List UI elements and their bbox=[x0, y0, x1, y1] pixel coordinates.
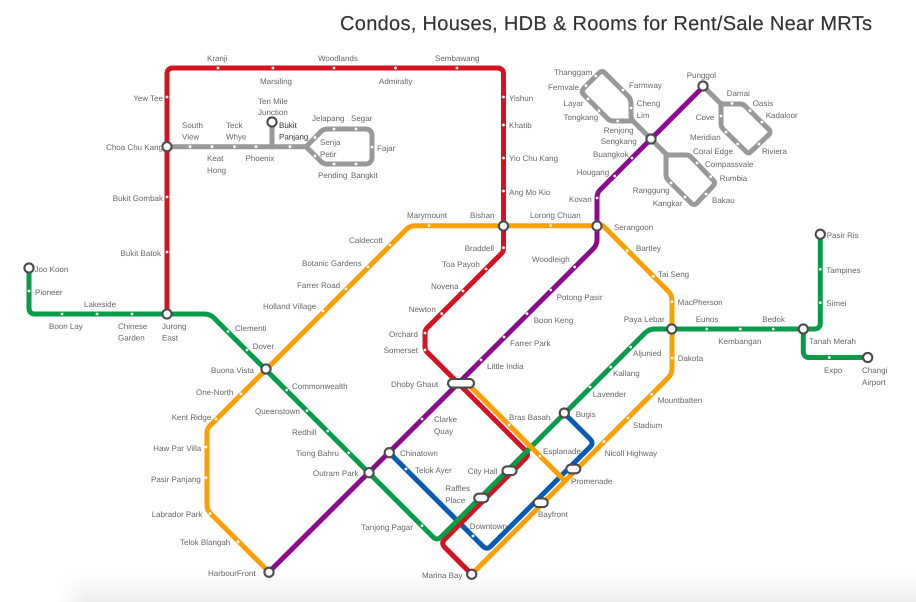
station labels: circle line: Bartley bbox=[636, 244, 661, 253]
station labels: east-west line: Lakeside bbox=[84, 300, 117, 309]
station labels: east-west line: Dover bbox=[253, 342, 274, 351]
station labels: north-south line: Toa Payoh bbox=[442, 260, 480, 269]
station labels: downtown line: Downtown bbox=[470, 522, 507, 531]
title: Condos, Houses, HDB & Rooms for Rent/Sale Near MRTs bbox=[340, 13, 872, 35]
station labels: north-east line: Potong Pasir bbox=[557, 293, 603, 302]
station labels: east-west line: Aljunied bbox=[633, 349, 661, 358]
bottom shadow bbox=[70, 587, 916, 602]
station labels: east-west line: Chinese bbox=[118, 322, 148, 331]
station labels: bukit panjang LRT: Jelapang bbox=[312, 114, 344, 123]
station labels: bukit panjang LRT: Phoenix bbox=[246, 154, 274, 163]
station labels: north-east line bbox=[208, 150, 653, 578]
station labels: north-south line: Yishun bbox=[509, 94, 533, 103]
station labels: north-east line: Clarke bbox=[434, 415, 458, 424]
station labels: bukit panjang LRT: Petir bbox=[320, 150, 337, 159]
station labels: north-south line bbox=[106, 54, 558, 580]
station labels: east-west line: Redhill bbox=[292, 428, 317, 437]
station labels: east-west line: City Hall bbox=[468, 467, 498, 476]
station labels: bukit panjang LRT: Keat bbox=[207, 154, 224, 163]
station labels: sengkang and punggol LRT bbox=[548, 68, 798, 208]
station labels: east-west line: Simei bbox=[826, 299, 847, 308]
line: orange circle bbox=[207, 226, 672, 574]
station labels: circle line: Lorong Chuan bbox=[530, 211, 581, 220]
station labels: circle line: Bras Basah bbox=[509, 413, 550, 422]
station labels: north-south line: Novena bbox=[431, 282, 459, 291]
station labels: circle line: One-North bbox=[196, 388, 233, 397]
station labels: north-south line: Sembawang bbox=[435, 54, 479, 63]
station labels: circle line: Nicoll Highway bbox=[605, 449, 657, 458]
station labels: east-west line: Boon Lay bbox=[49, 322, 83, 331]
station labels: east-west line: Bugis bbox=[576, 410, 596, 419]
station labels: north-south line: Orchard bbox=[389, 330, 418, 339]
station labels: circle line: Labrador Park bbox=[152, 510, 203, 519]
station labels: bukit panjang LRT: Junction bbox=[258, 108, 288, 117]
station labels: circle line bbox=[151, 211, 723, 547]
station labels: east-west line: Tanjong Pagar bbox=[361, 523, 413, 532]
station labels: north-east line: Chinatown bbox=[400, 449, 438, 458]
station labels: circle line: Botanic Gardens bbox=[302, 259, 362, 268]
station labels: east-west line: Raffles bbox=[445, 484, 470, 493]
station labels: east-west line: East bbox=[162, 334, 179, 342]
station labels: bukit panjang LRT: Ten Mile bbox=[258, 97, 288, 106]
station labels: north-south line: Dhoby Ghaut bbox=[391, 380, 439, 389]
station labels: sengkang and punggol LRT: Oasis bbox=[753, 99, 773, 108]
station labels: circle line: Haw Par Villa bbox=[153, 444, 202, 453]
station labels: circle line: Holland Village bbox=[263, 302, 317, 311]
station labels: sengkang and punggol LRT: Meridian bbox=[690, 133, 721, 142]
station labels: bukit panjang LRT: Segar bbox=[351, 114, 373, 123]
station labels: bukit panjang LRT: View bbox=[182, 132, 199, 142]
station labels: bukit panjang LRT bbox=[182, 97, 396, 180]
line: purple north-east bbox=[269, 87, 703, 572]
station labels: north-south line: Admiralty bbox=[379, 77, 412, 86]
station labels: north-east line: Woodleigh bbox=[532, 255, 570, 264]
station labels: sengkang and punggol LRT: Ranggung bbox=[633, 186, 670, 195]
station labels: sengkang and punggol LRT: Cove bbox=[696, 113, 715, 122]
station labels: bukit panjang LRT: Hong bbox=[207, 166, 226, 175]
station labels: north-south line: Newton bbox=[409, 305, 436, 314]
interchange stations bbox=[24, 81, 872, 579]
station labels: bukit panjang LRT: Pending bbox=[318, 171, 347, 180]
station labels: east-west line: Kallang bbox=[613, 369, 640, 378]
station labels: east-west line: Buona Vista bbox=[211, 366, 255, 375]
station labels: east-west line: Outram Park bbox=[313, 469, 359, 478]
station labels: circle line: Tai Seng bbox=[658, 270, 689, 279]
station labels: north-south line: Bishan bbox=[470, 211, 494, 220]
station labels: circle line: Telok Blangah bbox=[180, 538, 230, 547]
station labels: north-south line: Yew Tee bbox=[133, 94, 164, 103]
station labels: east-west line: Tiong Bahru bbox=[296, 449, 339, 458]
station labels: east-west line: Kembangan bbox=[718, 337, 761, 346]
station labels: north-south line: Khatib bbox=[509, 121, 532, 130]
line: green east-west bbox=[29, 234, 868, 539]
station labels: north-east line: Quay bbox=[434, 427, 453, 436]
station labels: north-south line: Marsiling bbox=[260, 77, 292, 86]
station labels: north-east line: Kovan bbox=[569, 195, 592, 204]
station labels: east-west line: Pioneer bbox=[35, 288, 63, 297]
station dots bbox=[28, 67, 831, 543]
station labels: circle line: Kent Ridge bbox=[172, 413, 212, 422]
station labels: north-south line: Ang Mo Kio bbox=[509, 188, 551, 197]
station labels: sengkang and punggol LRT: Coral Edge bbox=[693, 147, 734, 156]
station labels: circle line: Marymount bbox=[407, 211, 448, 220]
station labels: sengkang and punggol LRT: Fernvale bbox=[548, 83, 580, 92]
station labels: east-west line: Lavender bbox=[593, 390, 626, 399]
station labels: east-west line: Place bbox=[445, 496, 466, 505]
station labels: circle line: Caldecott bbox=[349, 236, 384, 245]
station labels: north-east line: Buangkok bbox=[593, 150, 630, 159]
station labels: sengkang and punggol LRT: Cheng bbox=[637, 99, 660, 108]
station labels: bukit panjang LRT: Whye bbox=[226, 132, 247, 142]
station labels: sengkang and punggol LRT: Sengkang bbox=[601, 137, 637, 146]
station labels: north-south line: Kranji bbox=[207, 54, 228, 63]
station labels: sengkang and punggol LRT: Rumbia bbox=[720, 174, 748, 183]
station labels: north-east line: Hougang bbox=[577, 168, 609, 177]
station labels: downtown line: Promenade bbox=[571, 477, 613, 486]
station labels: north-east line: Boon Keng bbox=[534, 316, 573, 325]
station labels: east-west line: Bedok bbox=[762, 315, 786, 324]
line: red north-south bbox=[167, 68, 528, 574]
station labels: north-south line: Bukit Batok bbox=[121, 249, 162, 258]
station labels: circle line: Stadium bbox=[633, 421, 663, 430]
station labels: bukit panjang LRT: Fajar bbox=[377, 144, 396, 153]
station labels: north-east line: HarbourFront bbox=[208, 569, 256, 578]
station labels: east-west line: Airport bbox=[862, 378, 886, 387]
station labels: sengkang and punggol LRT: Layar bbox=[564, 99, 584, 108]
station labels: north-south line: Marina Bay bbox=[422, 571, 462, 580]
station labels: downtown line: Bayfront bbox=[538, 510, 569, 519]
station labels: bukit panjang LRT: Senja bbox=[320, 138, 341, 147]
station labels: east-west line: Garden bbox=[118, 334, 145, 342]
station labels: sengkang and punggol LRT: Compassvale bbox=[705, 160, 754, 169]
station labels: north-east line: Serangoon bbox=[614, 223, 653, 232]
station labels: north-south line: Braddell bbox=[465, 244, 494, 253]
station labels: sengkang and punggol LRT: Kadaloor bbox=[766, 111, 798, 120]
station labels: downtown line bbox=[415, 466, 613, 531]
station labels: north-south line: Somerset bbox=[384, 346, 419, 355]
station labels: east-west line: Clementi bbox=[235, 324, 267, 333]
station labels: circle line: Mountbatten bbox=[658, 396, 702, 405]
station labels: east-west line: Paya Lebar bbox=[624, 315, 665, 324]
station labels: sengkang and punggol LRT: Lim bbox=[637, 111, 650, 120]
station labels: east-west line: Changi bbox=[862, 366, 888, 375]
station labels: bukit panjang LRT: South bbox=[182, 121, 203, 130]
station labels: sengkang and punggol LRT: Tongkang bbox=[564, 113, 598, 122]
station labels: circle line: Pasir Panjang bbox=[151, 475, 201, 484]
station labels: north-south line: Yio Chu Kang bbox=[509, 154, 558, 163]
station labels: sengkang and punggol LRT: Punggol bbox=[687, 71, 716, 80]
station labels: circle line: Farrer Road bbox=[297, 281, 340, 290]
station labels: bukit panjang LRT: Bukit bbox=[279, 121, 298, 130]
station labels: bukit panjang LRT: Bangkit bbox=[351, 171, 378, 180]
station labels: east-west line: Queenstown bbox=[255, 407, 300, 416]
station labels: east-west line: Commonwealth bbox=[292, 382, 348, 391]
station labels: sengkang and punggol LRT: Thanggam bbox=[554, 68, 593, 77]
station labels: east-west line: Joo Koon bbox=[34, 265, 68, 274]
line: blue downtown bbox=[389, 413, 592, 548]
station labels: circle line: MacPherson bbox=[678, 298, 723, 307]
line: grey LRT bbox=[167, 72, 770, 204]
station labels: north-south line: Bukit Gombak bbox=[113, 194, 164, 203]
station labels: downtown line: Telok Ayer bbox=[415, 466, 452, 475]
station labels: sengkang and punggol LRT: Farmway bbox=[629, 81, 662, 90]
station labels: north-south line: Woodlands bbox=[318, 54, 358, 63]
station labels: east-west line: Tanah Merah bbox=[809, 337, 856, 346]
station labels: east-west line: Pasir Ris bbox=[827, 231, 859, 240]
station labels: sengkang and punggol LRT: Damai bbox=[727, 89, 750, 98]
station labels: east-west line: Tampines bbox=[826, 266, 861, 275]
station labels: north-east line: Little India bbox=[487, 362, 524, 371]
station labels: north-east line: Farrer Park bbox=[510, 339, 551, 348]
station labels: sengkang and punggol LRT: Riviera bbox=[762, 147, 787, 156]
station labels: north-south line: Choa Chu Kang bbox=[106, 143, 163, 152]
station labels: circle line: Esplanade bbox=[543, 447, 581, 456]
station labels: east-west line: Jurong bbox=[162, 322, 186, 331]
station labels: bukit panjang LRT: Teck bbox=[226, 121, 243, 130]
station labels: east-west line: Expo bbox=[824, 366, 843, 375]
station labels: east-west line: Eunos bbox=[696, 315, 718, 324]
station labels: bukit panjang LRT: Panjang bbox=[279, 132, 308, 142]
station labels: circle line: Dakota bbox=[678, 354, 704, 363]
station labels: east-west line bbox=[34, 231, 888, 532]
station labels: sengkang and punggol LRT: Bakau bbox=[712, 196, 735, 205]
station labels: sengkang and punggol LRT: Renjong bbox=[604, 126, 634, 135]
station labels: sengkang and punggol LRT: Kangkar bbox=[653, 199, 683, 208]
